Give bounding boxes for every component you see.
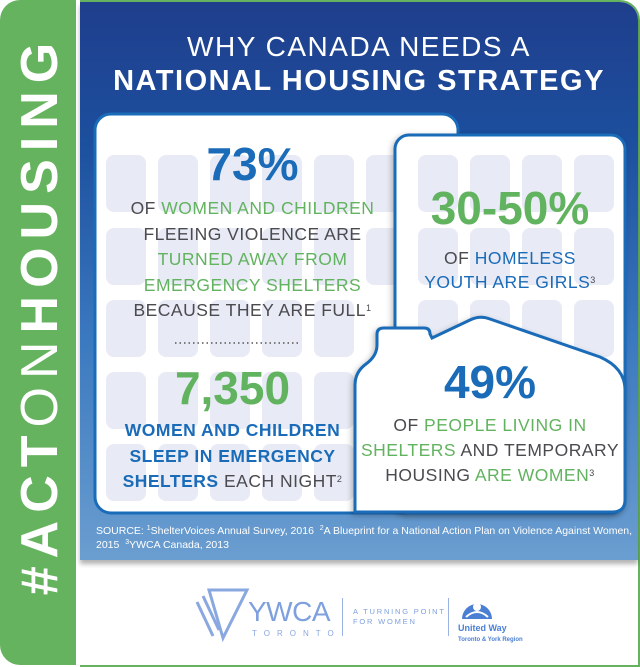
stat: 49%: OF PEOPLE LIVING IN xyxy=(393,415,587,435)
footer logos: Toronto & York Region xyxy=(458,637,523,643)
footer logos: United Way xyxy=(458,623,507,633)
title xyxy=(113,31,605,97)
stat: 49%: HOUSING ARE WOMEN3 xyxy=(385,465,595,485)
icon: United Way xyxy=(462,604,492,619)
stat: 49%: SHELTERS AND TEMPORARY xyxy=(361,440,619,460)
stat: 7,350: SHELTERS EACH NIGHT2 xyxy=(123,471,342,491)
stat: 7,350: SLEEP IN EMERGENCY xyxy=(129,446,336,466)
title: NATIONAL HOUSING STRATEGY xyxy=(113,65,605,97)
footer logos: TORONTO xyxy=(252,629,341,638)
stat: 73%: TURNED AWAY FROM xyxy=(158,249,347,269)
source text: SOURCE: 1ShelterVoices Annual Survey, 2016 2A Blueprint for a National Action Plan on Violence Against Women, 2015 3YWCA Canada, 2013 xyxy=(96,525,632,551)
stat: 73%: OF WOMEN AND CHILDREN xyxy=(131,198,374,218)
stat: 30-50% xyxy=(424,182,596,292)
tagline xyxy=(353,607,446,626)
panel: building 2 xyxy=(395,135,625,513)
YWCA text: YWCA xyxy=(248,596,330,627)
stat: 30-50%: YOUTH ARE GIRLS3 xyxy=(424,272,596,292)
stat: 73%: FLEEING VIOLENCE ARE xyxy=(143,224,362,244)
stat: 49%: 49% xyxy=(444,356,536,408)
stat: 49% xyxy=(361,356,619,485)
tagline: FOR WOMEN xyxy=(353,617,417,626)
tagline: A TURNING POINT xyxy=(353,607,446,616)
stat: 73%: 73% xyxy=(206,138,299,190)
stat: 73%: EMERGENCY SHELTERS xyxy=(144,274,361,294)
stat: 30-50%: OF HOMELESS xyxy=(444,248,576,268)
stat: 7,350: 7,350 xyxy=(175,362,290,414)
stat: 7,350 xyxy=(123,362,342,491)
stat: 73% xyxy=(131,138,374,320)
icon: YWCA triangle xyxy=(196,588,250,642)
dotted divider xyxy=(175,342,300,344)
stat: 7,350: WOMEN AND CHILDREN xyxy=(125,420,340,440)
stat: 73%: BECAUSE THEY ARE FULL1 xyxy=(133,300,372,320)
panel: house xyxy=(355,317,625,512)
title: WHY CANADA NEEDS A xyxy=(187,31,531,62)
sidebar: #ACTONHOUSING: #ACTONHOUSING xyxy=(11,35,69,595)
panel: building 1 xyxy=(95,114,458,513)
stat: 30-50%: 30-50% xyxy=(431,182,589,234)
blue background panel xyxy=(80,2,638,560)
footer logos xyxy=(196,588,523,643)
sidebar: #ACTONHOUSING xyxy=(0,0,76,665)
